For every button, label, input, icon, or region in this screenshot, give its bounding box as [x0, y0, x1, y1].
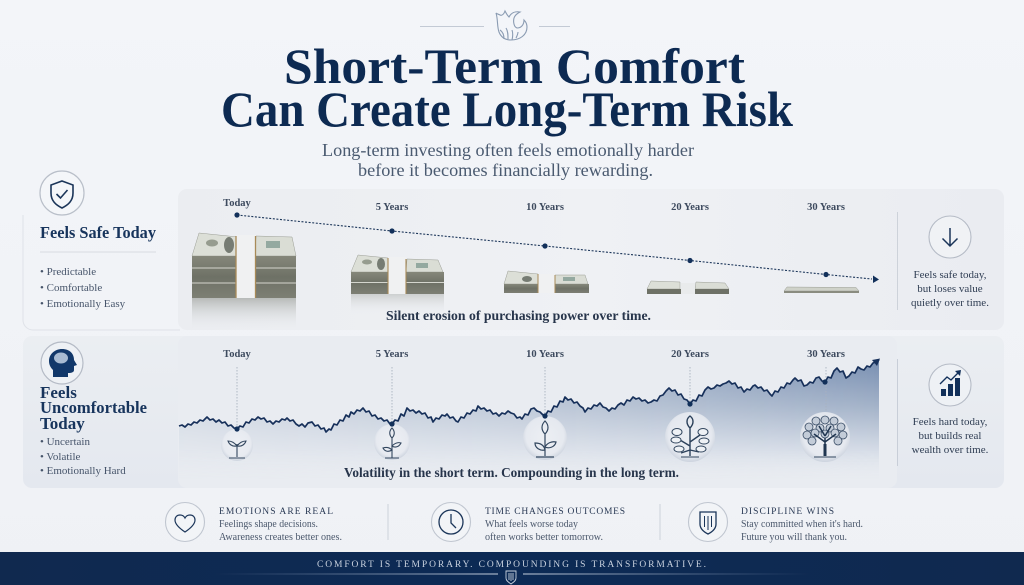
time labels: 10 Years [526, 349, 564, 360]
bullets: • Emotionally Hard [40, 465, 126, 477]
time labels [223, 198, 845, 213]
cash stack: 5 years [351, 255, 444, 314]
takeaway: time changes outcomes: What feels worse today [485, 519, 578, 530]
area under growth line [179, 361, 879, 462]
icon: head [41, 342, 83, 384]
side note: quietly over time. [911, 297, 989, 309]
icon: rising bar chart [929, 364, 971, 406]
takeaway: time changes outcomes [432, 502, 626, 543]
subtitle: Long-term investing often feels emotionally harder [322, 140, 694, 160]
cash stack: 10 years [504, 271, 589, 293]
time labels: 20 Years [671, 202, 709, 213]
sphere: small plant [523, 416, 567, 460]
bullets: • Comfortable [40, 282, 102, 294]
sphere: young tree [665, 412, 715, 462]
time labels: 5 Years [376, 202, 408, 213]
subtitle: before it becomes financially rewarding. [358, 160, 653, 180]
takeaway: discipline wins [688, 502, 863, 543]
sphere: mature tree [800, 412, 850, 462]
panel: erosion chart [178, 189, 1004, 330]
card outline [23, 215, 180, 330]
side note: but loses value [917, 283, 983, 295]
bullets: • Emotionally Easy [40, 298, 126, 310]
bullets [40, 436, 126, 477]
bullets [40, 266, 126, 310]
time labels: 30 Years [807, 202, 845, 213]
takeaway: time changes outcomes: often works better tomorrow. [485, 532, 603, 543]
icon: clock [432, 502, 470, 542]
icon: heart [166, 502, 204, 542]
takeaway: discipline wins: Future you will thank you. [741, 532, 847, 543]
subtitle [322, 140, 694, 180]
takeaway: discipline wins: DISCIPLINE WINS [741, 507, 835, 517]
time labels: 5 Years [376, 349, 408, 360]
heading: Uncomfortable [40, 398, 147, 417]
icon: footer shield [506, 571, 516, 584]
takeaway: time changes outcomes: TIME CHANGES OUTCOMES [485, 507, 626, 517]
side note [911, 269, 989, 309]
footer banner: COMFORT IS TEMPORARY. COMPOUNDING IS TRANSFORMATIVE. [317, 560, 706, 570]
title [221, 39, 793, 137]
icon: shield check [40, 171, 84, 215]
takeaway: emotions are real: Awareness creates better ones. [219, 532, 342, 543]
time labels: 30 Years [807, 349, 845, 360]
heading: Feels [40, 383, 77, 402]
ornament: cornucopia [420, 11, 570, 40]
takeaway: discipline wins: Stay committed when it's hard. [741, 519, 863, 530]
heading [40, 383, 147, 433]
side note: but builds real [919, 430, 981, 442]
sphere: seedling [221, 429, 253, 461]
title: Can Create Long-Term Risk [221, 82, 793, 137]
time labels [223, 349, 845, 360]
takeaway: emotions are real: EMOTIONS ARE REAL [219, 507, 334, 517]
bullets: • Volatile [40, 451, 81, 463]
time labels: 10 Years [526, 202, 564, 213]
growth line [179, 358, 880, 432]
heading: Today [40, 414, 85, 433]
cash stack: today [192, 233, 296, 330]
heading: Feels Safe Today [40, 223, 156, 242]
side note: Feels hard today, [913, 416, 988, 428]
bullets: • Predictable [40, 266, 96, 278]
panel: feels uncomfortable today [23, 336, 1004, 488]
side note [912, 416, 989, 456]
declining dotted line [234, 212, 879, 283]
takeaway: emotions are real: Feelings shape decisions. [219, 519, 318, 530]
takeaway: emotions are real [166, 502, 342, 543]
sphere: sapling [374, 424, 410, 460]
caption: Silent erosion of purchasing power over time. [386, 308, 651, 323]
side note: wealth over time. [912, 444, 989, 456]
time labels: Today [223, 198, 252, 209]
cash stack: 30 years [784, 287, 859, 293]
time labels: Today [223, 349, 252, 360]
icon: shield [688, 502, 728, 542]
panel: feels safe today [23, 171, 180, 330]
title: Short-Term Comfort [284, 39, 746, 94]
icon: down arrow [929, 216, 971, 258]
caption: Volatility in the short term. Compounding in the long term. [344, 465, 679, 480]
footer banner [0, 552, 1024, 585]
cash stack: 20 years [647, 281, 729, 294]
side note: Feels safe today, [914, 269, 987, 281]
bullets: • Uncertain [40, 436, 90, 448]
time labels: 20 Years [671, 349, 709, 360]
